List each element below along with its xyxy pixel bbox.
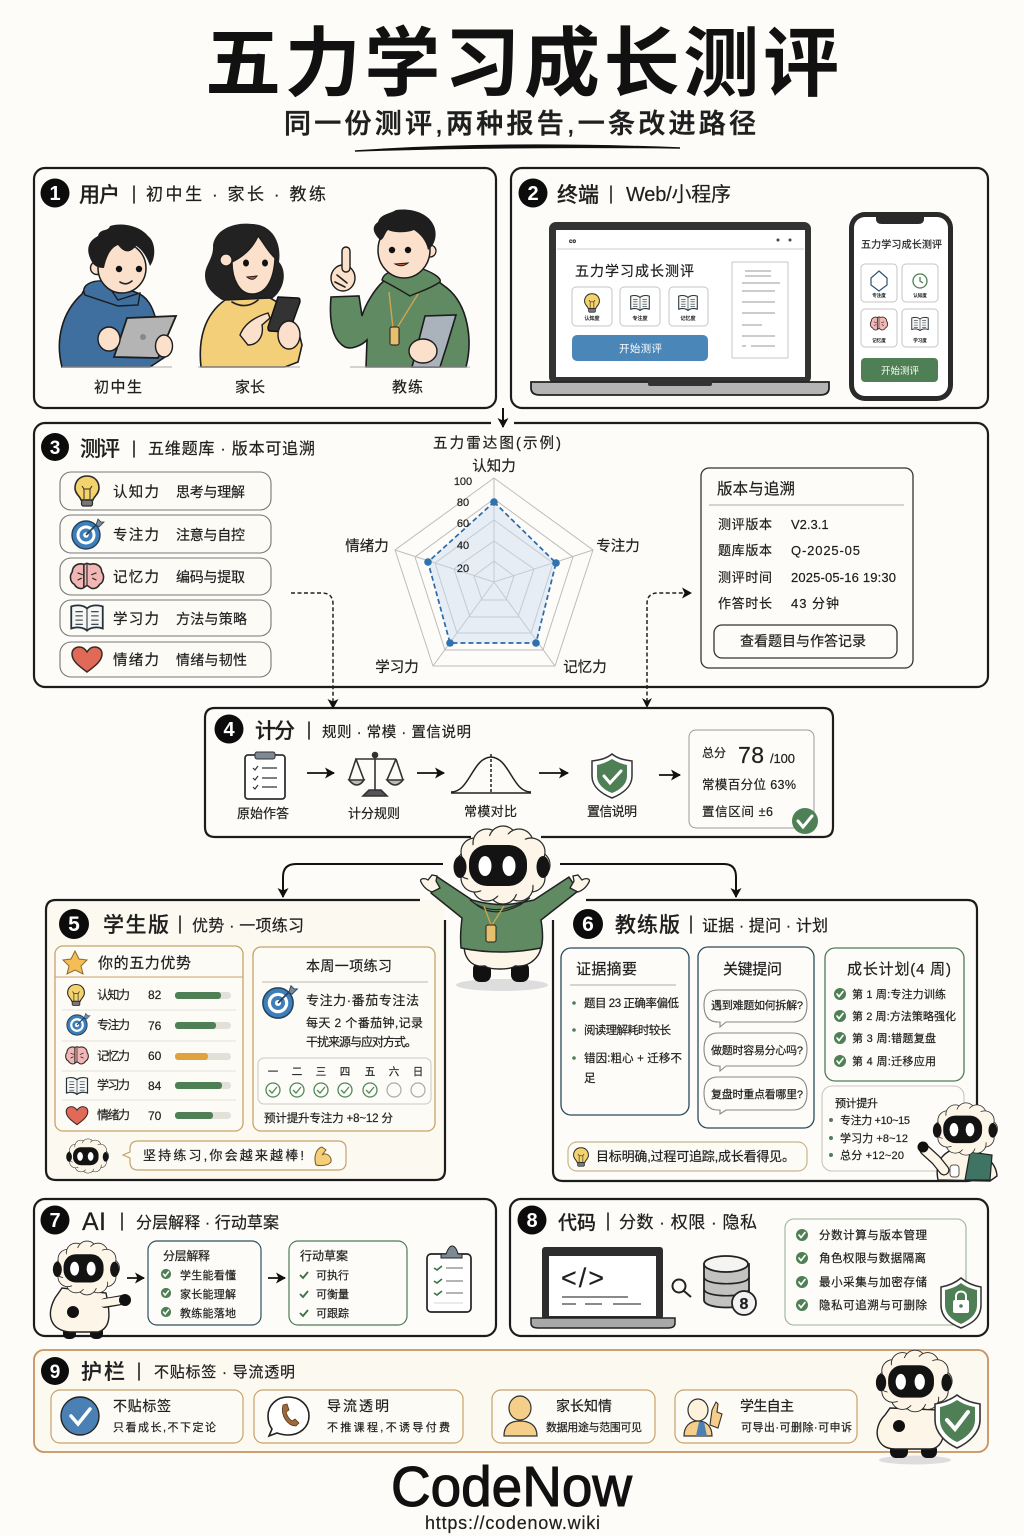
card: student autonomy: 学生自主 [740, 1398, 794, 1414]
laptop: 记忆度 [680, 315, 696, 322]
icon: magnifier [672, 1280, 691, 1297]
evidence card: 阅读理解耗时较长 [584, 1023, 672, 1037]
strengths card: 学习力 [97, 1077, 130, 1092]
radar chart: 情绪力 [345, 538, 389, 555]
logo: CodeNow [391, 1455, 633, 1519]
version card: 查看题目与作答记录 [740, 633, 866, 649]
label: rules: 计分规则 [348, 806, 400, 821]
radar chart: 学习力 [375, 659, 419, 676]
arrow [659, 774, 680, 776]
guardrail mascot [876, 1350, 980, 1464]
card: student autonomy [675, 1390, 857, 1443]
callout: 目标明确,过程可追踪,成长看得见。 [596, 1149, 795, 1164]
panel 9: guardrails [34, 1350, 988, 1452]
radar chart: 20 [457, 563, 469, 575]
weekly practice card: 三 [316, 1066, 326, 1078]
weekly practice card: 日 [413, 1066, 423, 1078]
phone: 五力学习成长测评 [861, 238, 942, 251]
action draft card: 可跟踪 [316, 1306, 349, 1320]
heading 4 subtitle: 规则 · 常模 · 置信说明 [322, 724, 471, 741]
label: parent: 家长 [235, 379, 265, 396]
expected gain card: 预计提升 [835, 1097, 878, 1110]
questions card: 遇到难题如何拆解? [711, 998, 803, 1012]
badge 8 [518, 1206, 546, 1234]
expected gain card: 学习力 +8~12 [840, 1131, 908, 1145]
heading 4: 计分 [255, 720, 295, 743]
badge 6: 6 [582, 913, 594, 936]
score card: 常模百分位 63% [702, 777, 796, 792]
figure: parent [198, 224, 302, 367]
phone: 学习度 [913, 337, 927, 344]
figure: student [59, 224, 176, 367]
heading 1 subtitle: 初中生 · 家长 · 教练 [146, 185, 326, 204]
card: parent informed: 家长知情 [556, 1398, 612, 1414]
growth plan card: 第 2 周:方法策略强化 [852, 1009, 956, 1023]
evidence card: 证据摘要 [576, 960, 637, 978]
badge 5: 5 [68, 913, 80, 936]
dimension list [60, 472, 271, 677]
label: confidence: 置信说明 [587, 804, 637, 819]
score card: 总分 [702, 746, 726, 760]
version card: 测评版本 [718, 517, 772, 532]
icon: scales [349, 752, 403, 796]
heading 2: 终端 [557, 184, 599, 207]
security list card: 隐私可追溯与可删除 [819, 1298, 928, 1312]
layered explanation card [148, 1241, 261, 1325]
questions card: 关键提问 [723, 961, 782, 978]
phone [849, 212, 953, 401]
security list card: 角色权限与数据隔离 [819, 1251, 926, 1265]
growth plan card: 第 1 周:专注力训练 [852, 987, 946, 1001]
weekly practice card [253, 947, 435, 1131]
layered explanation card: 教练能落地 [180, 1306, 236, 1320]
AI mascot [50, 1241, 131, 1339]
dimension list: 方法与策略 [176, 611, 247, 627]
badge 4: 4 [223, 719, 235, 741]
badge 9 [41, 1357, 69, 1385]
dimension list: 注意与自控 [176, 527, 245, 543]
heading 6: 教练版 [615, 914, 680, 937]
weekly practice card: 五 [365, 1066, 375, 1078]
evidence card: 足 [584, 1073, 596, 1085]
strengths card: 记忆力 [97, 1049, 130, 1063]
panel 6: coach report [553, 900, 997, 1181]
weekly practice card: 六 [389, 1066, 399, 1078]
version card: 43 分钟 [791, 596, 839, 611]
dimension list: 情绪力 [113, 652, 159, 669]
radar chart: 40 [457, 540, 469, 552]
badge 2: 2 [527, 183, 539, 205]
icon: database: 8 [740, 1296, 749, 1313]
dimension list: 情绪与韧性 [176, 652, 247, 668]
weekly practice card: 干扰来源与应对方式。 [306, 1034, 417, 1049]
growth plan card: 成长计划(4 周) [847, 961, 951, 978]
heading 6 subtitle: 证据 · 提问 · 计划 [702, 917, 828, 935]
growth plan card [825, 948, 964, 1081]
badge 4 [214, 714, 244, 744]
badge 1: 1 [49, 183, 61, 205]
icon: database [704, 1256, 756, 1315]
arrowhead: into scoring right [642, 698, 652, 708]
laptop: co [569, 239, 576, 245]
radar chart: 五力雷达图(示例) [433, 435, 561, 452]
strengths card: 76 [148, 1019, 162, 1033]
evidence card: 题目 23 正确率偏低 [584, 996, 680, 1010]
url: https://codenow.wiki [425, 1513, 600, 1533]
badge 7 [40, 1206, 70, 1234]
heading 7 subtitle: 分层解释 · 行动草案 [136, 1214, 279, 1232]
strengths card: 你的五力优势 [98, 955, 191, 972]
version card: Q-2025-05 [791, 543, 860, 558]
card: transparent referral: 不推课程,不诱导付费 [327, 1420, 450, 1434]
laptop: 五力学习成长测评 [575, 263, 694, 279]
heading 7: AI [82, 1208, 106, 1236]
heading 8 subtitle: 分数 · 权限 · 隐私 [619, 1213, 757, 1232]
card: no labels: 只看成长,不下定论 [113, 1420, 216, 1434]
heading 1: 用户 [79, 184, 120, 207]
radar chart: 60 [457, 518, 469, 530]
card: parent informed [492, 1390, 655, 1443]
phone: 记忆度 [872, 337, 886, 344]
strengths card: 情绪力 [97, 1108, 130, 1122]
label: student: 初中生 [94, 379, 142, 396]
panel 1: users [34, 168, 496, 408]
arrow: devices to assessment [502, 408, 504, 427]
badge 5 [59, 909, 89, 939]
phone: 认知度 [913, 292, 927, 299]
arrow [539, 772, 568, 774]
panel 2: devices [511, 168, 988, 408]
icon: bell curve [451, 754, 531, 793]
expected gain card: 专注力 +10~15 [840, 1113, 910, 1127]
version card: 题库版本 [718, 543, 772, 558]
dimension list: 专注力 [113, 527, 159, 544]
version card [701, 468, 913, 668]
radar chart: 记忆力 [563, 659, 607, 676]
radar chart [345, 435, 640, 676]
badge 3 [41, 433, 69, 461]
growth plan card: 第 3 周:错题复盘 [852, 1031, 936, 1045]
heading 5 subtitle: 优势 · 一项练习 [192, 917, 304, 935]
panel 3: assessment [34, 420, 988, 687]
badge 1 [40, 178, 70, 208]
small mascot [66, 1139, 109, 1173]
score card: /100 [770, 751, 795, 766]
card: no labels: 不贴标签 [113, 1398, 171, 1414]
dashed arrow: scoring to version [647, 593, 691, 702]
growth plan card: 第 4 周:迁移应用 [852, 1054, 936, 1068]
label: coach: 教练 [392, 379, 423, 396]
weekly practice card: 本周一项练习 [306, 958, 392, 974]
version card: 作答时长 [718, 596, 772, 611]
weekly practice card: 四 [340, 1066, 350, 1078]
action draft card [289, 1241, 407, 1325]
questions card: 做题时容易分心吗? [711, 1043, 803, 1057]
icon: shield [592, 754, 632, 798]
weekly practice card: 每天 2 个番茄钟,记录 [306, 1015, 423, 1030]
main mascot [421, 826, 589, 991]
laptop code [531, 1247, 675, 1328]
subtitle underline [355, 145, 680, 151]
card: transparent referral [254, 1390, 463, 1443]
badge 3: 3 [50, 438, 60, 459]
weekly practice card: 一 [268, 1066, 279, 1078]
radar chart: 100 [454, 476, 472, 488]
strengths card [55, 946, 243, 1131]
action draft card: 行动草案 [300, 1248, 348, 1263]
strengths card: 84 [148, 1079, 162, 1093]
arrow [307, 772, 334, 774]
score card: 78 [738, 742, 764, 768]
connector: to coach report [560, 864, 736, 897]
label: norm: 常模对比 [464, 804, 517, 819]
radar chart: 认知力 [472, 458, 516, 475]
heading 8: 代码 [558, 1212, 596, 1234]
panel 8: code [510, 1199, 988, 1336]
evidence card: 错因:粗心 + 迁移不 [584, 1051, 682, 1065]
icon: clipboard [245, 752, 285, 799]
badge 6 [573, 909, 603, 939]
arrow [127, 1277, 144, 1279]
badge 8: 8 [526, 1210, 538, 1232]
phone: 专注度 [872, 292, 886, 299]
layered explanation card: 分层解释 [163, 1249, 210, 1263]
score card [689, 730, 818, 834]
laptop [531, 222, 829, 395]
dashed arrow: dimensions to scoring [291, 593, 333, 708]
laptop: 开始测评 [619, 342, 662, 355]
weekly practice card: 二 [292, 1066, 302, 1078]
dimension list: 记忆力 [113, 569, 159, 586]
expected gain card [822, 1086, 964, 1171]
security list card [785, 1219, 966, 1325]
evidence card [561, 948, 689, 1115]
version card: 测评时间 [718, 570, 772, 585]
dimension list: 思考与理解 [176, 484, 245, 500]
security list card: 最小采集与加密存储 [819, 1275, 928, 1289]
connector: to student report [283, 864, 443, 897]
subtitle: 同一份测评,两种报告,一条改进路径 [284, 109, 756, 139]
questions card [698, 947, 814, 1128]
expected gain card: 总分 +12~20 [840, 1148, 904, 1162]
action draft card: 可衡量 [316, 1288, 349, 1301]
callout [568, 1142, 807, 1171]
arrow [268, 1277, 285, 1279]
panel 4: scoring [205, 708, 833, 837]
card: parent informed: 数据用途与范围可见 [546, 1420, 642, 1434]
radar chart: 80 [457, 497, 469, 509]
laptop: 认知度 [584, 315, 600, 322]
heading 9 subtitle: 不贴标签 · 导流透明 [154, 1364, 295, 1381]
panel 5: student report [46, 900, 445, 1180]
label: raw answers: 原始作答 [237, 806, 289, 821]
laptop: 专注度 [632, 315, 648, 322]
heading 2 subtitle: Web/小程序 [626, 183, 731, 206]
dimension list: 编码与提取 [176, 569, 245, 585]
layered explanation card: 学生能看懂 [180, 1268, 236, 1282]
strengths card: 认知力 [97, 988, 130, 1002]
card: transparent referral: 导流透明 [327, 1398, 389, 1414]
heading 5: 学生版 [103, 914, 169, 937]
arrow [417, 772, 444, 774]
dimension list: 学习力 [113, 611, 159, 628]
action draft card: 可执行 [316, 1268, 349, 1282]
score card: 置信区间 ±6 [702, 805, 773, 819]
strengths card: 60 [148, 1049, 162, 1063]
laptop code: </> [561, 1263, 604, 1293]
weekly practice card: 预计提升专注力 +8~12 分 [264, 1111, 394, 1125]
badge 9: 9 [50, 1362, 60, 1383]
phone: 开始测评 [881, 365, 919, 377]
version card: V2.3.1 [791, 517, 829, 532]
dimension list: 认知力 [113, 484, 159, 501]
panel 7: AI [34, 1199, 496, 1339]
figure: coach [330, 210, 470, 367]
heading 9: 护栏 [81, 1361, 125, 1384]
badge 7: 7 [49, 1210, 61, 1232]
strengths card: 82 [148, 988, 162, 1002]
security list card: 分数计算与版本管理 [819, 1228, 928, 1242]
radar chart: 专注力 [596, 538, 640, 555]
version card: 2025-05-16 19:30 [791, 570, 896, 585]
version card: 版本与追溯 [717, 480, 795, 498]
card: student autonomy: 可导出·可删除·可申诉 [741, 1420, 852, 1434]
title: 五力学习成长测评 [205, 22, 839, 107]
speech bubble: 坚持练习,你会越来越棒! [143, 1148, 304, 1163]
card: no labels [51, 1390, 243, 1443]
weekly practice card: 专注力·番茄专注法 [306, 993, 419, 1008]
badge 2 [518, 178, 548, 208]
heading 3 subtitle: 五维题库 · 版本可追溯 [148, 440, 315, 458]
coach mascot [918, 1103, 997, 1181]
heading 3: 测评 [80, 438, 120, 461]
speech bubble [123, 1141, 346, 1170]
icon: lock shield [941, 1278, 981, 1328]
layered explanation card: 家长能理解 [180, 1287, 236, 1301]
questions card: 复盘时重点看哪里? [711, 1087, 803, 1101]
strengths card: 70 [148, 1109, 162, 1123]
strengths card: 专注力 [97, 1017, 130, 1032]
icon: checklist [427, 1246, 471, 1312]
